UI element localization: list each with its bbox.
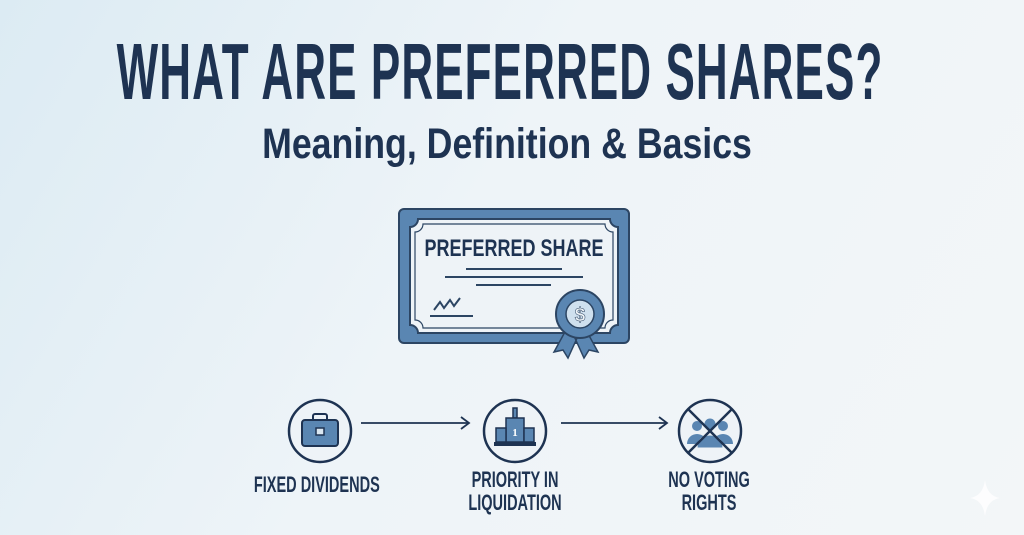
certificate illustration [398,208,630,360]
title: WHAT ARE PREFERRED SHARES? [117,27,883,116]
arrow 1 [361,416,470,430]
icon: briefcase [288,398,352,464]
icon: sparkle [972,482,998,514]
label: priority in liquidation: LIQUIDATION [468,490,562,515]
icon: no voting [678,398,742,464]
label: no voting rights [668,467,750,515]
certificate illustration: $ [575,305,586,326]
subtitle: Meaning, Definition & Basics [262,120,752,168]
label: no voting rights: RIGHTS [682,490,736,515]
label: priority in liquidation: PRIORITY IN [472,467,558,492]
icon: podium [482,398,548,464]
certificate illustration: PREFERRED SHARE [425,236,603,262]
arrow 2 [561,416,668,430]
icon: podium: 1 [512,427,518,439]
label: fixed dividends: FIXED DIVIDENDS [254,472,380,497]
label: no voting rights: NO VOTING [668,467,750,492]
label: priority in liquidation [468,467,562,515]
